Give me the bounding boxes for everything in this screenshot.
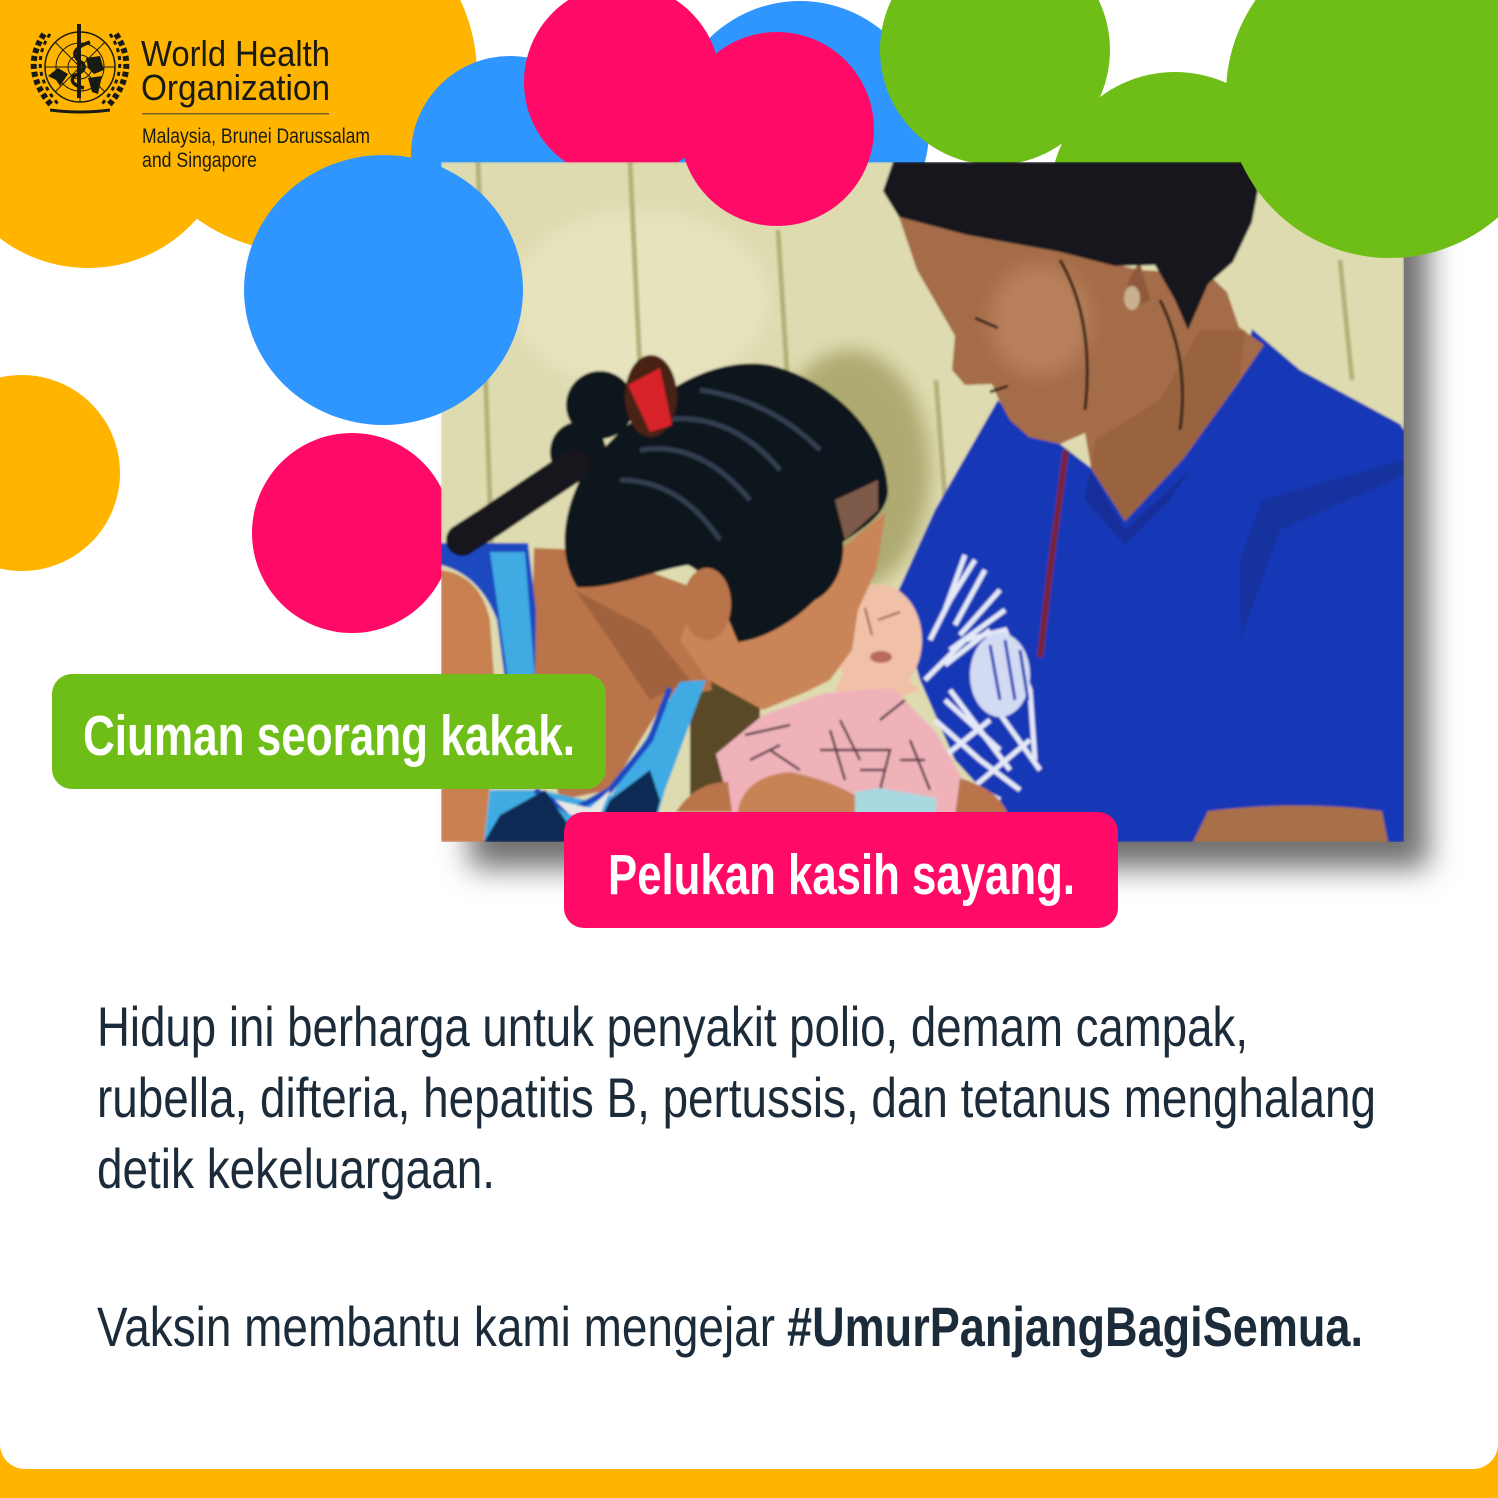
sister: arm and chest skin	[441, 548, 712, 842]
mother: arm	[1193, 806, 1388, 842]
sister: hair	[462, 363, 888, 642]
logo wordmark: Organization	[141, 67, 330, 108]
sister: scrunchie	[625, 355, 677, 437]
decorative circles behind photo	[0, 0, 1300, 633]
photo shadow	[470, 200, 1428, 868]
mother: face and neck	[899, 217, 1264, 521]
sister: face	[680, 512, 886, 710]
logo wordmark: Malaysia, Brunei Darussalam	[142, 125, 370, 148]
logo wordmark: and Singapore	[142, 149, 257, 172]
baby: head	[834, 584, 922, 705]
callout: pink label: Pelukan kasih sayang.	[608, 843, 1075, 907]
decorative circles over photo	[244, 0, 1498, 425]
closing line with hashtag	[97, 1295, 1363, 1358]
baby: arms and mitt	[676, 772, 1008, 815]
callout: green label: Ciuman seorang kakak.	[83, 704, 575, 768]
body text paragraph: detik kekeluargaan.	[97, 1137, 495, 1200]
mother: shirt	[896, 329, 1404, 842]
callout: pink label	[564, 812, 1118, 928]
mother: hair	[883, 162, 1258, 330]
callout: green label	[52, 674, 606, 789]
photo: sister kissing baby held by mother	[441, 162, 1404, 842]
dark background below faces	[690, 680, 760, 810]
body text paragraph: Hidup ini berharga untuk penyakit polio, demam campak,	[97, 995, 1248, 1058]
body text paragraph	[97, 995, 1376, 1200]
logo wordmark: World Health	[141, 33, 330, 74]
baby: outfit	[716, 688, 961, 815]
wall	[441, 162, 1404, 842]
mother: lanyard	[1040, 450, 1066, 657]
WHO logo	[34, 24, 370, 172]
mother: shirt print	[925, 555, 1040, 800]
icon: WHO emblem	[34, 24, 126, 112]
closing line with hashtag: #UmurPanjangBagiSemua.	[787, 1295, 1363, 1358]
logo wordmark	[141, 33, 370, 172]
closing line with hashtag: Vaksin membantu kami mengejar	[97, 1295, 775, 1358]
sister: ear	[683, 568, 731, 640]
sister: tank top	[441, 543, 706, 842]
